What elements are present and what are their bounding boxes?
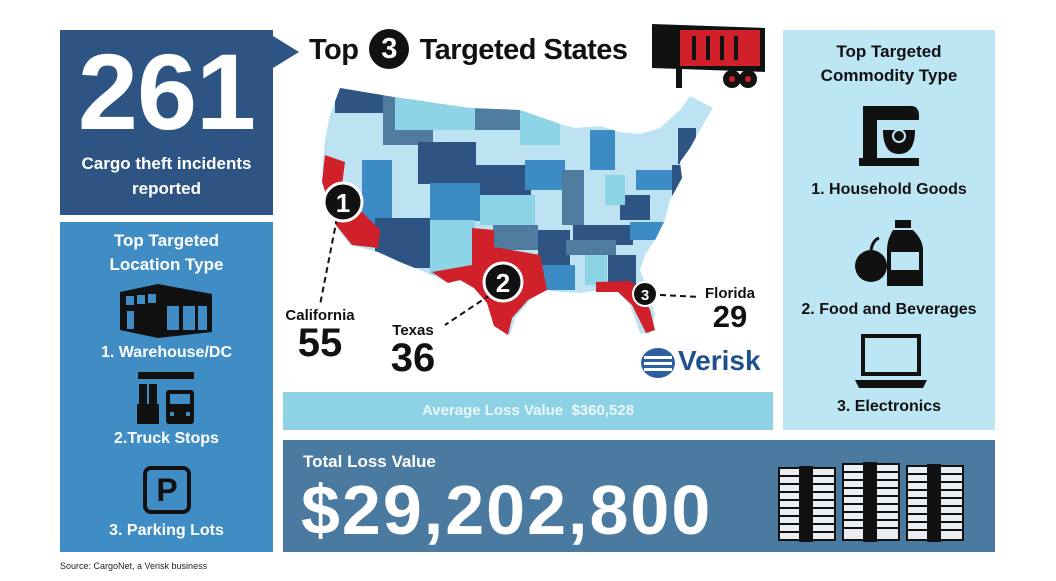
- label Florida: [705, 285, 756, 334]
- average loss bar: Average Loss Value $360,528: [422, 402, 634, 419]
- label Florida: Florida: [705, 285, 755, 302]
- label California: 55: [298, 321, 342, 365]
- icon: money stacks: [778, 462, 964, 542]
- title: 3: [381, 33, 397, 65]
- icon: food: [855, 220, 923, 286]
- heading location: [110, 231, 223, 274]
- label warehouse: 1. Warehouse/DC: [101, 344, 232, 361]
- caption incidents: Cargo theft incidents: [81, 154, 252, 173]
- heading commodity: Commodity Type: [821, 66, 957, 85]
- average loss bar: [283, 392, 773, 430]
- connector lines: [320, 218, 337, 305]
- chart: US map: 1: [336, 188, 350, 218]
- label California: [285, 307, 355, 365]
- panel: location type: [60, 222, 273, 552]
- chart: US map: 2: [496, 268, 510, 298]
- panel: commodity type: [783, 30, 995, 430]
- label Texas: Texas: [392, 322, 434, 339]
- icon: truck stop: [137, 372, 194, 424]
- label household: 1. Household Goods: [811, 181, 967, 198]
- arrow pointer: [273, 36, 299, 68]
- heading commodity: Top Targeted: [836, 42, 942, 61]
- big number 261: 261: [78, 31, 255, 152]
- label electronics: 3. Electronics: [837, 398, 941, 415]
- label California: California: [285, 307, 355, 324]
- Florida: [596, 281, 655, 333]
- icon: mixer: [859, 106, 919, 166]
- chart: US map: 3: [641, 287, 649, 304]
- icon: parking: [143, 466, 191, 514]
- panel: total loss: [283, 440, 995, 552]
- logo Verisk: Verisk: [678, 345, 761, 376]
- badges: [324, 183, 362, 221]
- title: Top Targeted States: [309, 34, 628, 66]
- icon: parking: P: [156, 472, 178, 508]
- heading location: Top Targeted: [114, 231, 219, 250]
- label parking: 3. Parking Lots: [109, 522, 224, 539]
- label food: 2. Food and Beverages: [801, 301, 977, 318]
- label Texas: 36: [391, 336, 435, 380]
- icon: laptop: [855, 334, 927, 388]
- chart: US map: [320, 88, 713, 335]
- label total loss: Total Loss Value: [303, 452, 436, 471]
- Texas: [432, 228, 547, 335]
- heading location: Location Type: [110, 255, 223, 274]
- total loss value: $29,202,800: [301, 471, 712, 549]
- caption incidents: reported: [132, 179, 201, 198]
- panel: 261 incidents: [60, 30, 273, 215]
- icon: warehouse: [120, 284, 212, 338]
- label truck stops: 2.Truck Stops: [114, 430, 219, 447]
- caption incidents: [81, 154, 252, 198]
- source text: Source: CargoNet, a Verisk business: [60, 561, 207, 571]
- California: [322, 155, 380, 248]
- label Florida: 29: [713, 299, 747, 334]
- icon: cargo trailer: [652, 24, 765, 88]
- logo Verisk: [641, 345, 761, 378]
- heading commodity: [821, 42, 957, 85]
